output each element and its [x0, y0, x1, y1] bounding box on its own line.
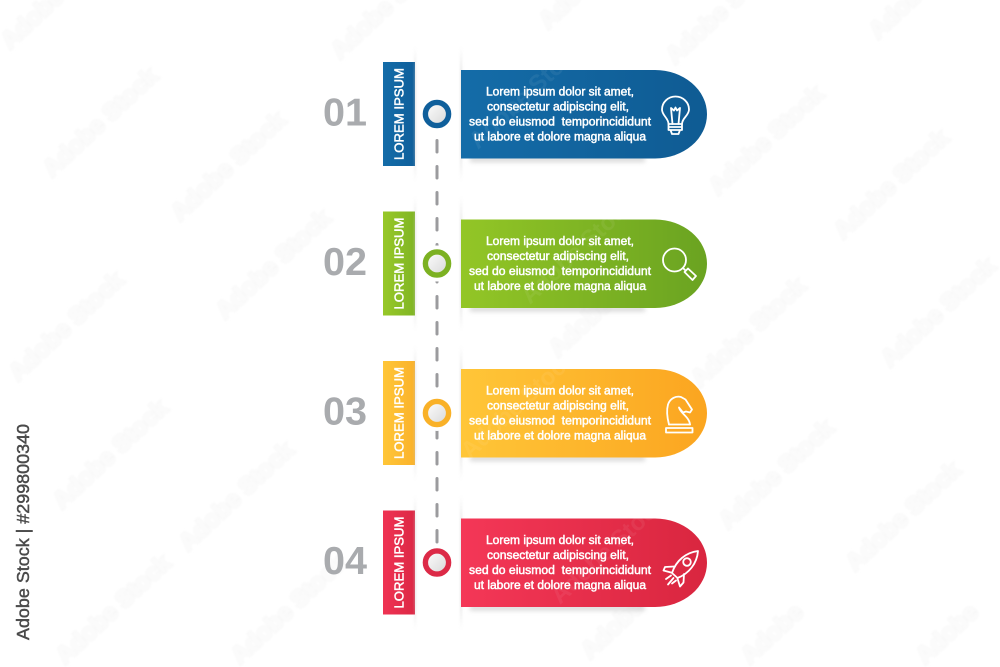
tab: step 2 label — [383, 212, 415, 316]
step 3 — [323, 346, 707, 480]
pill shadow — [470, 606, 645, 610]
tab: step 1 label — [383, 62, 415, 166]
watermark pattern: Adobe Stock — [876, 252, 1000, 372]
text block: step 1: Lorem ipsum dolor sit amet, — [486, 84, 634, 98]
pill: step 1 — [461, 70, 707, 158]
pill shadow — [470, 306, 645, 312]
watermark pattern: Adobe Stock — [226, 549, 352, 667]
text block: step 1: sed do eiusmod temporincididunt — [469, 114, 652, 128]
watermark pattern: Adobe Stock — [51, 549, 177, 667]
marker: step 4 — [419, 544, 455, 580]
step 4 — [323, 496, 707, 630]
icon: light bulb — [662, 97, 689, 134]
timeline: dashed line — [436, 140, 438, 552]
watermark pattern: Adobe Stock — [714, 414, 840, 534]
watermark pattern: Adobe Stock — [38, 62, 164, 182]
tab: step 3 label: LOREM IPSUM — [392, 367, 406, 459]
step 1 — [323, 47, 707, 181]
tab: step 4 label — [383, 510, 415, 614]
text block: step 1: consectetur adipiscing elit, — [487, 100, 629, 114]
pill: step 4 — [461, 518, 707, 607]
tab: step 4 label: LOREM IPSUM — [392, 516, 406, 608]
watermark pattern: Adobe Stock — [174, 436, 300, 556]
number 01: 01 — [323, 92, 367, 134]
text block: step 2: sed do eiusmod temporincididunt — [469, 264, 652, 278]
road edge shadows — [414, 496, 462, 630]
text block: step 2 — [469, 234, 652, 293]
watermark pattern: Adobe Stock — [829, 124, 955, 244]
text block: step 1: ut labore et dolore magna aliqua — [474, 130, 646, 144]
number 02: 02 — [323, 241, 367, 284]
watermark pattern: Adobe Stock — [686, 272, 812, 392]
watermark pattern: Adobe Stock — [576, 544, 702, 664]
text block: step 3 — [469, 384, 652, 442]
tab: step 1 label: LOREM IPSUM — [392, 68, 406, 160]
text block: step 2: consectetur adipiscing elit, — [487, 249, 629, 263]
number 03: 03 — [323, 390, 367, 434]
text block: step 3: ut labore et dolore magna aliqua — [474, 428, 646, 442]
road edge shadows — [414, 47, 462, 181]
marker: step 3 — [419, 395, 455, 431]
watermark pattern: Adobe Stock — [48, 394, 174, 514]
icon: magnifying glass — [663, 248, 696, 280]
text block: step 4 — [469, 533, 652, 592]
text block: step 4: ut labore et dolore magna aliqua — [474, 578, 646, 592]
road edge shadows — [414, 196, 462, 330]
watermark pattern: Adobe Stock — [211, 204, 337, 324]
pill: step 2 — [461, 220, 707, 308]
pill: step 3 — [461, 369, 707, 458]
watermark over pills: Adobe Stock — [546, 489, 672, 609]
text block: step 2: Lorem ipsum dolor sit amet, — [486, 234, 634, 248]
watermark pattern: Adobe Stock — [544, 242, 670, 362]
watermark over pills — [456, 34, 672, 609]
pill shadow — [470, 456, 645, 461]
watermark over pills: Adobe Stock — [456, 344, 582, 464]
text block: step 4: Lorem ipsum dolor sit amet, — [486, 533, 634, 547]
step 2 — [323, 196, 707, 330]
text block: step 1 — [469, 84, 652, 144]
marker: step 1 — [419, 96, 455, 132]
watermark pattern: Adobe Stock — [841, 456, 967, 576]
text block: step 4: sed do eiusmod temporincididunt — [469, 563, 652, 577]
pill shadow — [470, 157, 645, 162]
watermark pattern: Adobe Stock — [4, 266, 130, 386]
watermark over pills: Adobe Stock — [464, 34, 590, 154]
marker: step 2 — [419, 246, 455, 282]
text block: step 3: Lorem ipsum dolor sit amet, — [486, 384, 634, 398]
text block: step 3: consectetur adipiscing elit, — [487, 398, 629, 412]
text block: step 2: ut labore et dolore magna aliqua — [474, 279, 646, 293]
road edge shadows — [414, 346, 462, 480]
icon: chess knight — [666, 397, 692, 432]
watermark over pills: Adobe Stock — [516, 189, 642, 309]
tab: step 3 label — [383, 361, 415, 465]
stock id vertical text: Adobe Stock | #299800340 — [13, 424, 33, 640]
icon: rocket — [664, 551, 698, 586]
tab: step 2 label: LOREM IPSUM — [392, 217, 406, 310]
watermark pattern: Adobe Stock — [704, 80, 830, 200]
text block: step 3: sed do eiusmod temporincididunt — [469, 414, 652, 428]
watermark pattern: Adobe Stock — [166, 106, 292, 226]
text block: step 4: consectetur adipiscing elit, — [487, 548, 629, 562]
number 04: 04 — [323, 540, 368, 583]
